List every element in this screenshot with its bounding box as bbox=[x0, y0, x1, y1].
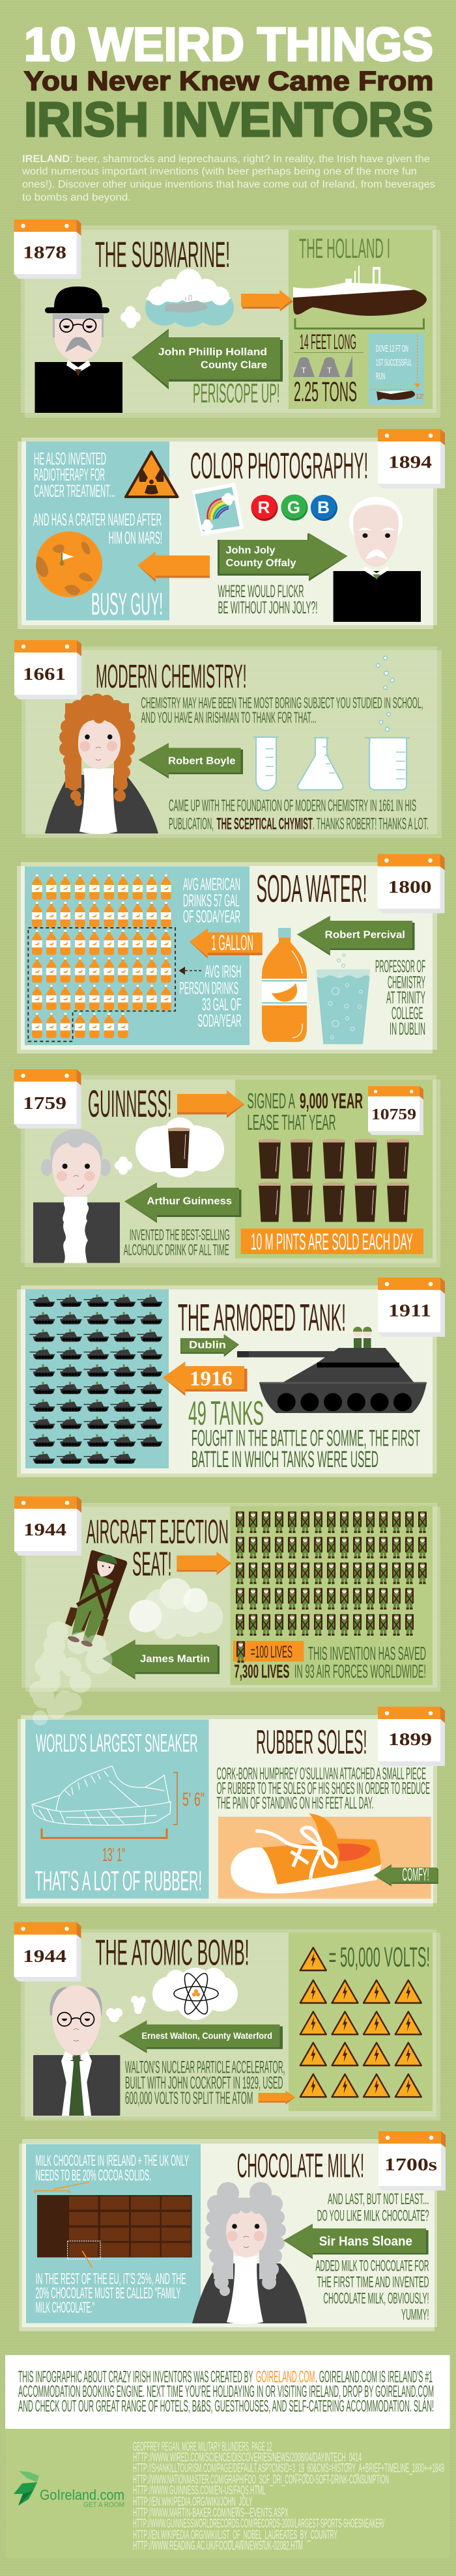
intro text bbox=[21, 154, 435, 203]
polaroid rainbow bbox=[192, 483, 244, 536]
text: milk chocolate story bbox=[315, 2191, 429, 2324]
text: cocoa solids UK bbox=[35, 2152, 189, 2184]
panel: armored tank: 49 TANKS bbox=[188, 1395, 264, 1433]
name arrow: Robert Percival bbox=[297, 916, 414, 956]
intro text: IRELAND : beer, shamrocks and leprechauns, right? In reality, the Irish have given the bbox=[22, 154, 430, 165]
calendar: 1894: 1894 bbox=[388, 452, 432, 471]
name arrow: James Martin bbox=[102, 1640, 220, 1679]
calendar: 1661 bbox=[14, 640, 81, 699]
footer: credits: GOIRELAND.COM bbox=[256, 2368, 315, 2386]
text: professor bbox=[375, 957, 425, 1039]
text: best-selling bbox=[124, 1227, 230, 1259]
panel: soda water: 33 GAL OF bbox=[202, 995, 241, 1015]
calendar: 1878 bbox=[14, 219, 81, 279]
soda glass bbox=[317, 954, 370, 1044]
name arrow: Robert Boyle: Robert Boyle bbox=[168, 755, 236, 767]
calendar: 1759 bbox=[14, 1069, 81, 1128]
calendar: 1800 bbox=[378, 854, 444, 913]
name arrow: John Joly: John Joly bbox=[225, 545, 276, 556]
portrait: Ernest Walton bbox=[33, 1985, 120, 2116]
name arrow: James Martin: James Martin bbox=[140, 1654, 210, 1665]
lab glassware bbox=[253, 737, 410, 791]
name arrow: John Joly: County Offaly bbox=[225, 557, 296, 569]
name arrow: Arthur Guinness: Arthur Guinness bbox=[147, 1196, 232, 1207]
text: American soda bbox=[183, 875, 240, 926]
calendar: 1944 bbox=[14, 1496, 81, 1556]
arrow: 1 gallon bbox=[190, 929, 263, 959]
panel: chocolate milk bbox=[20, 2131, 446, 2331]
icon: radiation bbox=[126, 452, 177, 497]
arrow: idea to submarine bbox=[241, 290, 293, 311]
calendar: 1944: 1944 bbox=[23, 1520, 66, 1539]
legend: 100 lives: =100 LIVES bbox=[251, 1642, 292, 1662]
dashed arrow bbox=[178, 966, 203, 975]
panel: chocolate milk: MILK CHOCOLATE IN IRELAND + THE UK ONLY bbox=[35, 2152, 189, 2170]
ejected pilot bbox=[65, 1550, 127, 1648]
panel: submarine: 14 FEET LONG bbox=[300, 330, 356, 354]
name arrow: John Phillip Holland bbox=[132, 329, 283, 389]
legend: 100 lives bbox=[233, 1641, 304, 1663]
arrow: to lives saved bbox=[177, 1552, 231, 1575]
arrow: to voltage chart bbox=[258, 2091, 295, 2105]
text: 9,000 year lease bbox=[248, 1089, 363, 1134]
panel: submarine: 2.25 TONS bbox=[294, 376, 357, 408]
calendar: 1661: 1661 bbox=[23, 664, 66, 684]
text: sceptical chymist bbox=[169, 797, 429, 833]
footer: credits bbox=[5, 2355, 450, 2429]
panel: guinness: ALCOHOLIC DRINK OF ALL TIME bbox=[124, 1241, 229, 1259]
panel: rubber soles: THAT'S A LOT OF RUBBER! bbox=[35, 1866, 202, 1897]
panel: soda water: PERSON DRINKS bbox=[180, 978, 238, 998]
RGB buttons: B bbox=[317, 497, 330, 517]
calendar: 10759 bbox=[368, 1086, 423, 1135]
thought bubble bbox=[121, 269, 234, 328]
dive diagram: RUN bbox=[376, 371, 385, 382]
text: radiotherapy: HE ALSO INVENTED bbox=[34, 449, 106, 469]
panel: guinness bbox=[14, 1069, 440, 1267]
weights icon: T bbox=[301, 366, 306, 375]
big soda bottle bbox=[262, 928, 307, 1042]
text: radiotherapy: CANCER TREATMENT... bbox=[34, 481, 115, 501]
logo: GoIreland.com: GET A ROOM bbox=[83, 2501, 124, 2509]
portrait: Arthur Guinness bbox=[33, 1129, 120, 1263]
thought bubble: atom bbox=[106, 1968, 238, 2023]
name arrow: Ernest Walton bbox=[119, 2021, 283, 2053]
arrow: Dublin: Dublin bbox=[189, 1339, 226, 1351]
panel: color photography: HIM ON MARS! bbox=[108, 528, 162, 548]
arrow: 1916 bbox=[163, 1362, 248, 1396]
name arrow: Sir Hans Sloane bbox=[283, 2224, 429, 2259]
weights icon: T bbox=[327, 366, 332, 375]
text: source list: HTTP://WWW.GUINNESS.COM/EN-US/FAQS.HTML bbox=[133, 2484, 266, 2498]
text: radiotherapy: RADIOTHERAPY FOR bbox=[34, 465, 105, 484]
text: sceptical chymist: THE SCEPTICAL CHYMIST bbox=[216, 815, 313, 833]
title: 10 WEIRD THINGS bbox=[24, 19, 433, 71]
name arrow: John Joly bbox=[218, 533, 348, 581]
text: source list: HTTP://EN.WIKIPEDIA.ORG/WIKI/JOHN_JOLY bbox=[133, 2495, 253, 2509]
arrow: 1916: 1916 bbox=[190, 1366, 233, 1390]
name arrow: John Phillip Holland: County Clare bbox=[201, 360, 267, 371]
RGB buttons bbox=[251, 495, 337, 521]
intro text: ones!). Discover other unique inventions that have come out of Ireland, from beverages bbox=[22, 179, 435, 190]
footer: sources bbox=[6, 2429, 449, 2558]
panel: soda water: AVG AMERICAN bbox=[183, 875, 240, 894]
panel: submarine: THE SUBMARINE! bbox=[95, 234, 230, 275]
calendar: 1878: 1878 bbox=[23, 242, 66, 262]
panel: atomic bomb bbox=[14, 1922, 440, 2121]
dimension: length: 13' 1" bbox=[102, 1845, 125, 1866]
bubbles bbox=[377, 656, 394, 731]
RGB buttons: R bbox=[258, 497, 270, 517]
text: 9,000 year lease: LEASE THAT YEAR bbox=[248, 1110, 336, 1134]
text: radiotherapy bbox=[33, 449, 162, 548]
panel: chocolate milk: IN THE REST OF THE EU, IT'S 25%, AND THE bbox=[35, 2270, 186, 2288]
text: source list bbox=[133, 2440, 444, 2553]
calendar: 1800: 1800 bbox=[388, 877, 431, 897]
panel: submarine: PERISCOPE UP! bbox=[193, 378, 280, 408]
text: lives saved bbox=[234, 1644, 426, 1683]
calendar: 1759: 1759 bbox=[23, 1093, 66, 1113]
text: cocoa solids UK: NEEDS TO BE 20% COCOA SOLIDS. bbox=[35, 2166, 151, 2184]
sneaker sketch bbox=[32, 1766, 171, 1825]
weights icon bbox=[293, 353, 363, 377]
text: boring subject bbox=[141, 694, 423, 727]
dive diagram bbox=[369, 333, 424, 405]
panel: atomic bomb: THE ATOMIC BOMB! bbox=[95, 1931, 249, 1972]
panel: armored tank bbox=[17, 1278, 445, 1477]
calendar: 10759: 10759 bbox=[371, 1106, 416, 1123]
intro text: to bombs and beyond. bbox=[22, 192, 131, 203]
panel: color photography: WHERE WOULD FLICKR bbox=[218, 581, 304, 601]
calendar: 1700s: 1700s bbox=[384, 2155, 437, 2174]
text: cocoa solids EU bbox=[35, 2270, 186, 2317]
panel: soda water: AVG IRISH bbox=[205, 962, 241, 981]
panel: color photography: BE WITHOUT JOHN JOLY?! bbox=[218, 598, 318, 617]
chart: bottles = gallons bbox=[28, 875, 175, 1041]
arrow: to lease bbox=[177, 1090, 244, 1118]
intro text: world numerous important inventions (with beer perhaps being one of the more fun bbox=[21, 166, 417, 177]
calendar: 1944: 1944 bbox=[23, 1946, 66, 1966]
name arrow: Sir Hans Sloane: Sir Hans Sloane bbox=[319, 2234, 412, 2248]
dimension: height: 5' 6" bbox=[182, 1789, 205, 1810]
panel: guinness: GUINNESS! bbox=[88, 1083, 172, 1125]
panel: rubber soles: WORLD'S LARGEST SNEAKER bbox=[36, 1729, 198, 1757]
planet: Mars bbox=[36, 531, 102, 597]
dive diagram: DOVE 12 FT ON bbox=[376, 343, 408, 354]
panel: soda water bbox=[17, 854, 444, 1054]
text: sceptical chymist: PUBLICATION, bbox=[169, 815, 214, 833]
dimension: length bbox=[42, 1828, 167, 1866]
text: O'Sullivan bbox=[216, 1763, 430, 1813]
text: 9,000 year lease: SIGNED A bbox=[248, 1089, 295, 1113]
calendar: 1700s bbox=[378, 2131, 446, 2191]
name arrow: Robert Percival: Robert Percival bbox=[325, 930, 405, 940]
portrait: John Phillip Holland bbox=[35, 287, 122, 413]
caption: flickr bbox=[218, 581, 318, 617]
panel: rubber soles bbox=[18, 1707, 445, 1907]
name arrow: Arthur Guinness bbox=[124, 1183, 241, 1223]
text: Irish soda bbox=[180, 962, 241, 1030]
text: particle accelerator bbox=[125, 2057, 285, 2108]
text: 9,000 year lease: 9,000 YEAR bbox=[300, 1089, 363, 1113]
panel: soda water: SODA/YEAR bbox=[198, 1011, 241, 1030]
panel: color photography bbox=[18, 429, 445, 629]
name arrow: Ernest Walton: Ernest Walton, County Waterford bbox=[142, 2031, 272, 2041]
calendar: 1911 bbox=[378, 1278, 445, 1337]
chart: warning triangles bbox=[300, 1980, 421, 2097]
dimension: height bbox=[173, 1772, 205, 1825]
title bbox=[23, 19, 434, 147]
calendar: 1894 bbox=[378, 429, 445, 488]
thought bubble: pint bbox=[115, 1117, 224, 1177]
chart: soldiers = 100 lives each bbox=[236, 1511, 427, 1636]
calendar: 1899 bbox=[378, 1707, 445, 1766]
panel: color photography: BUSY GUY! bbox=[91, 587, 163, 622]
legend: 50,000 volts bbox=[300, 1942, 430, 1973]
panel: modern chemistry: MODERN CHEMISTRY! bbox=[96, 658, 246, 695]
calendar: 1899: 1899 bbox=[388, 1729, 432, 1749]
panel: color photography: AND HAS A CRATER NAMED AFTER bbox=[33, 510, 162, 529]
big tank bbox=[237, 1327, 427, 1413]
panel: soda water: 1 GALLON bbox=[211, 931, 253, 955]
text: battle of Somme bbox=[192, 1426, 420, 1472]
panel: chocolate milk: 20% CHOCOLATE MUST BE CALLED "FAMILY bbox=[35, 2284, 181, 2302]
chocolate bar bbox=[35, 2182, 192, 2267]
portrait: Robert Boyle bbox=[45, 693, 158, 834]
panel: modern chemistry bbox=[14, 640, 442, 838]
logo: GoIreland.com bbox=[14, 2471, 124, 2509]
heading: aircraft ejection seat: SEAT! bbox=[132, 1546, 172, 1584]
portrait: Sir Hans Sloane bbox=[192, 2182, 307, 2324]
panel: soda water: DRINKS 57 GAL bbox=[183, 891, 240, 910]
arrow: to Mars bbox=[137, 552, 210, 582]
dive diagram: 12' bbox=[416, 393, 424, 400]
calendar: 1944 bbox=[14, 1922, 81, 1981]
submarine illustration bbox=[293, 266, 427, 316]
comfy sneaker bbox=[231, 1813, 382, 1894]
panel: ejection seat: AIRCRAFT EJECTION bbox=[86, 1513, 229, 1551]
portrait: John Joly bbox=[334, 497, 421, 622]
panel: soda water: OF SODA/YEAR bbox=[183, 906, 240, 926]
pints grid bbox=[259, 1139, 409, 1222]
chart: 49 tanks bbox=[30, 1295, 163, 1464]
calendar: 1911: 1911 bbox=[388, 1301, 431, 1321]
name arrow: comfy bbox=[374, 1864, 438, 1886]
RGB buttons: G bbox=[287, 497, 300, 517]
panel: ejection seat bbox=[14, 1496, 440, 1692]
logo: GoIreland.com: GoIreland.com bbox=[40, 2487, 124, 2503]
title: You Never Knew Came From bbox=[23, 65, 434, 96]
heading: aircraft ejection seat bbox=[86, 1513, 229, 1584]
text: lives saved: 7,300 LIVES bbox=[234, 1662, 289, 1683]
text: particle accelerator: 600,000 VOLTS TO SPLIT THE ATOM bbox=[125, 2088, 253, 2108]
name arrow: John Phillip Holland: John Phillip Holland bbox=[158, 346, 267, 358]
length bracket bbox=[295, 318, 423, 328]
text: cocoa solids EU: MILK CHOCOLATE." bbox=[35, 2299, 94, 2317]
panel: guinness: INVENTED THE BEST-SELLING bbox=[130, 1227, 230, 1244]
arrow: Dublin bbox=[180, 1334, 239, 1357]
title: IRISH INVENTORS bbox=[24, 92, 433, 147]
panel: submarine bbox=[14, 219, 440, 418]
name arrow: Robert Boyle bbox=[138, 743, 243, 779]
exhaust smoke bbox=[29, 1578, 223, 1726]
